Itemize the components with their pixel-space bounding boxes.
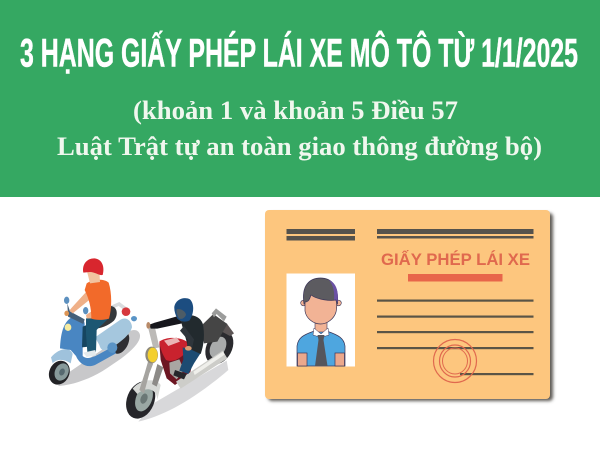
scooter side bulge — [107, 342, 117, 353]
exhaust pipes — [176, 351, 227, 389]
rider helmet — [83, 258, 103, 275]
neck — [315, 320, 327, 332]
subtitle: (khoản 1 và khoản 5 Điều 57 — [133, 95, 458, 125]
grab rail — [212, 308, 227, 321]
collar — [313, 328, 329, 338]
tie — [315, 335, 328, 366]
panel: driving licence card — [265, 210, 553, 401]
subtitle: Luật Trật tự an toàn giao thông đường bộ) — [57, 131, 542, 161]
red tank — [159, 338, 189, 361]
rider shoe — [83, 350, 96, 357]
motor frame — [159, 343, 195, 385]
rider arms — [69, 291, 90, 313]
rear wheel — [200, 325, 239, 369]
rear fender — [212, 323, 234, 336]
text lines — [377, 300, 534, 375]
front wheel — [121, 377, 161, 423]
icon: round stamp — [434, 340, 476, 382]
rider helmet — [174, 298, 193, 322]
engine — [169, 359, 184, 379]
rider jacket — [180, 315, 204, 354]
seat — [201, 314, 227, 343]
subtitle — [57, 95, 542, 161]
right header bars — [377, 229, 534, 238]
helmet visor — [176, 309, 186, 319]
front fender — [51, 349, 73, 363]
front wheel — [45, 357, 74, 388]
front fork — [139, 362, 153, 393]
rear rack — [110, 302, 129, 312]
title underline — [408, 274, 502, 282]
card body — [265, 210, 550, 399]
scooter shadow — [58, 330, 140, 386]
taillight — [122, 307, 130, 316]
icon: portrait photo — [286, 274, 355, 366]
rider near arm — [180, 326, 194, 349]
hair — [303, 278, 338, 304]
rider far leg — [82, 324, 89, 347]
card shadow — [268, 213, 553, 401]
face — [305, 295, 337, 324]
icon: motorcycle with rider in dark jacket — [121, 298, 239, 423]
rider torso — [85, 280, 111, 320]
seat — [93, 306, 117, 329]
headlight — [145, 347, 158, 363]
icon: scooter with rider in orange shirt — [45, 258, 140, 388]
rear wheel — [109, 329, 133, 357]
card title: GIẤY PHÉP LÁI XE — [381, 250, 530, 269]
shirt — [297, 330, 345, 366]
rider near leg — [86, 317, 109, 352]
handlebar post — [147, 325, 159, 349]
rider neck and face — [87, 270, 100, 283]
rider far arm — [149, 316, 182, 329]
scooter leg shield — [60, 316, 116, 366]
motorcycle shadow — [138, 361, 228, 422]
sleeves — [298, 353, 307, 366]
handlebar and mirrors — [64, 297, 69, 304]
rider boot — [173, 370, 187, 379]
ears — [301, 300, 306, 306]
front fender — [133, 380, 161, 400]
rider leg — [179, 347, 201, 374]
headlight — [65, 324, 71, 331]
left header bars — [286, 229, 355, 240]
scooter rear body — [95, 319, 132, 350]
